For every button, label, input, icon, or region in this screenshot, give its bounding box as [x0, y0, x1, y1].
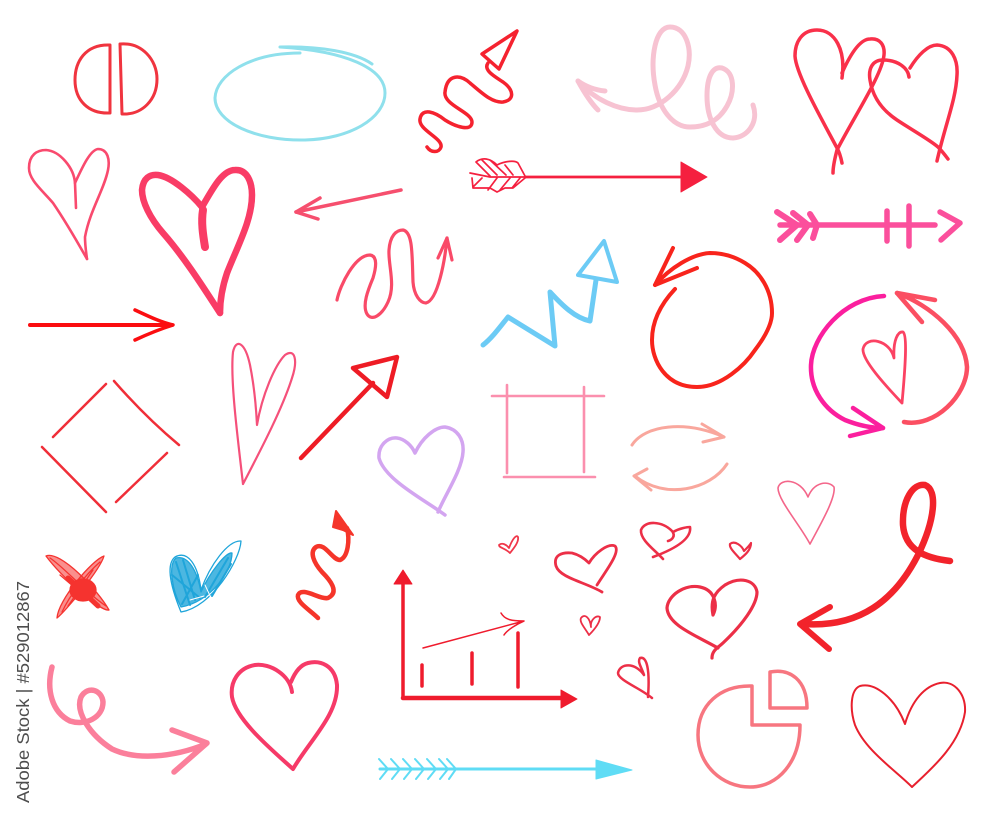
icon: tiny heart right [730, 543, 751, 559]
icon: pink red outline heart [232, 662, 337, 769]
icon: small tilted heart [618, 658, 652, 698]
icon: tall narrow heart [232, 344, 295, 484]
icon: tiny heart center [581, 616, 600, 635]
arrow: salmon cycle arrows [632, 424, 727, 490]
icon: blue scribbled heart [170, 541, 241, 612]
icon: broken-line diamond [42, 381, 179, 512]
icon: purple heart [379, 427, 463, 515]
icon: split circle [75, 44, 157, 114]
arrow: blue zigzag with triangle head [483, 241, 617, 346]
icon: thin outlined heart [778, 481, 834, 544]
icon: pink square frame [492, 385, 604, 477]
arrow: red diagonal arrow [301, 357, 397, 458]
arrow: pink wave with up arrow [337, 230, 452, 317]
arrow: magenta double-bar arrow [777, 206, 960, 246]
icon: hand-drawn heart [555, 545, 616, 592]
arrow: pale pink curl arrow [578, 27, 755, 138]
stock caption: Adobe Stock | #529012867 [13, 581, 33, 803]
arrow: red straight arrow [30, 310, 173, 340]
icon: tiny heart top [499, 536, 518, 553]
arrow: cyan feathered arrow [379, 759, 632, 779]
arrow: red feathered arrow [470, 159, 707, 192]
arrow: red circular arrow [652, 248, 772, 387]
arrow: red squiggle with triangle head [420, 31, 517, 152]
icon: open ribbon heart [641, 523, 690, 559]
arrow: orange-red small squiggle [298, 511, 353, 618]
icon: two overlapping hearts [795, 30, 957, 173]
arrow: red ribbon arrow [800, 485, 950, 649]
icon: big thick pink heart [142, 170, 252, 313]
icon: circular arrows with heart [811, 293, 967, 436]
icon: large looped heart [667, 580, 757, 658]
arrow: pink looped arrow [50, 667, 207, 772]
icon: small pink outline heart [29, 149, 109, 259]
icon: pie chart with slice [698, 671, 807, 787]
arrow: thin coral arrow pointing left [296, 190, 401, 219]
icon: red scribbled X [46, 555, 109, 618]
chart: rising bars with arrows [394, 570, 577, 708]
icon: red outline heart large [852, 683, 965, 787]
icon: cyan ellipse highlight [215, 47, 385, 140]
